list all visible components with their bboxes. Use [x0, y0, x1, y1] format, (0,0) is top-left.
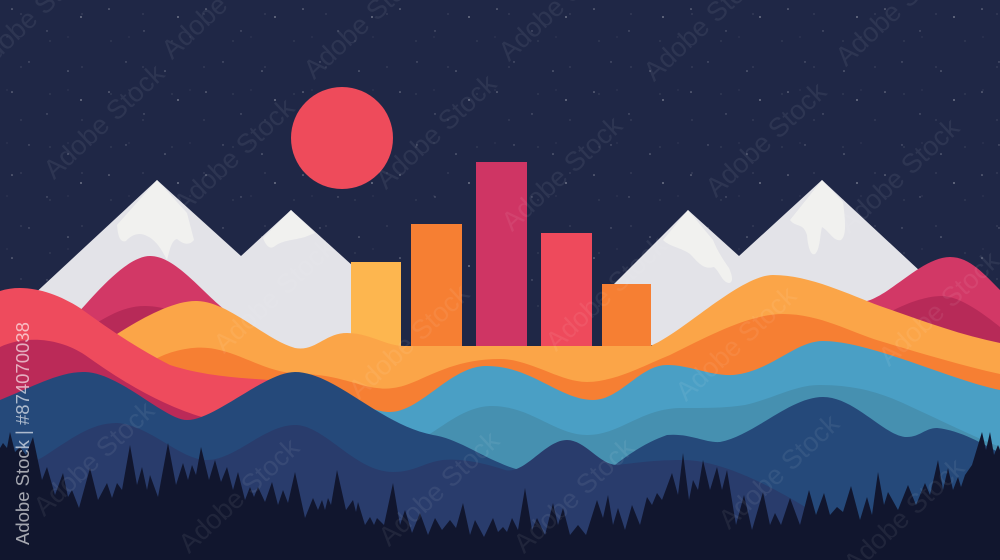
dark orange wave	[150, 314, 1000, 560]
bar 2	[411, 224, 462, 352]
watermark text: Adobe Stock	[713, 408, 845, 535]
light orange wave	[100, 275, 1000, 560]
darker crimson hill left	[93, 306, 175, 400]
teal wave	[327, 341, 1000, 560]
snow cap third peak	[663, 210, 732, 283]
vertical stock id caption: Adobe Stock | #874070038	[12, 322, 33, 545]
darker crimson hill right	[890, 296, 1000, 400]
snow cap second peak	[263, 210, 315, 248]
watermark text: Adobe Stock	[373, 425, 505, 552]
watermark text: Adobe Stock	[700, 76, 832, 203]
stars	[0, 0, 1000, 340]
red wave	[0, 288, 330, 500]
bar 4	[541, 233, 592, 352]
snow cap fourth peak	[790, 180, 845, 254]
watermark text: Adobe Stock	[168, 92, 300, 219]
bar 3	[476, 162, 527, 352]
navy hills	[0, 423, 810, 560]
watermark text: Adobe Stock	[343, 278, 475, 405]
watermark text: Adobe Stock	[208, 232, 340, 359]
crimson hill right	[860, 257, 1000, 400]
bar 1	[351, 262, 401, 352]
blue hills	[0, 372, 1000, 560]
bar chart	[351, 162, 651, 352]
dark crimson wave	[0, 340, 205, 450]
snow cap left peak	[117, 180, 194, 260]
watermark text: Adobe Stock	[508, 432, 640, 559]
pine forest silhouette	[0, 432, 1000, 560]
watermark text: Adobe Stock	[833, 112, 965, 239]
watermark text: Adobe Stock	[38, 58, 170, 185]
watermark text: Adobe Stock	[370, 68, 502, 195]
watermark text: Adobe Stock	[670, 280, 802, 407]
watermark text: Adobe Stock	[496, 110, 628, 237]
snowy mountains right	[606, 180, 921, 345]
bar 5	[602, 284, 651, 352]
snowy mountains left	[30, 180, 353, 350]
crimson hill left	[70, 256, 225, 400]
sun	[291, 87, 393, 189]
darker teal wave	[425, 385, 1000, 560]
watermark text: Adobe Stock	[173, 432, 305, 559]
watermark text: Adobe Stock	[28, 395, 160, 522]
watermark text: Adobe Stock	[540, 230, 672, 357]
